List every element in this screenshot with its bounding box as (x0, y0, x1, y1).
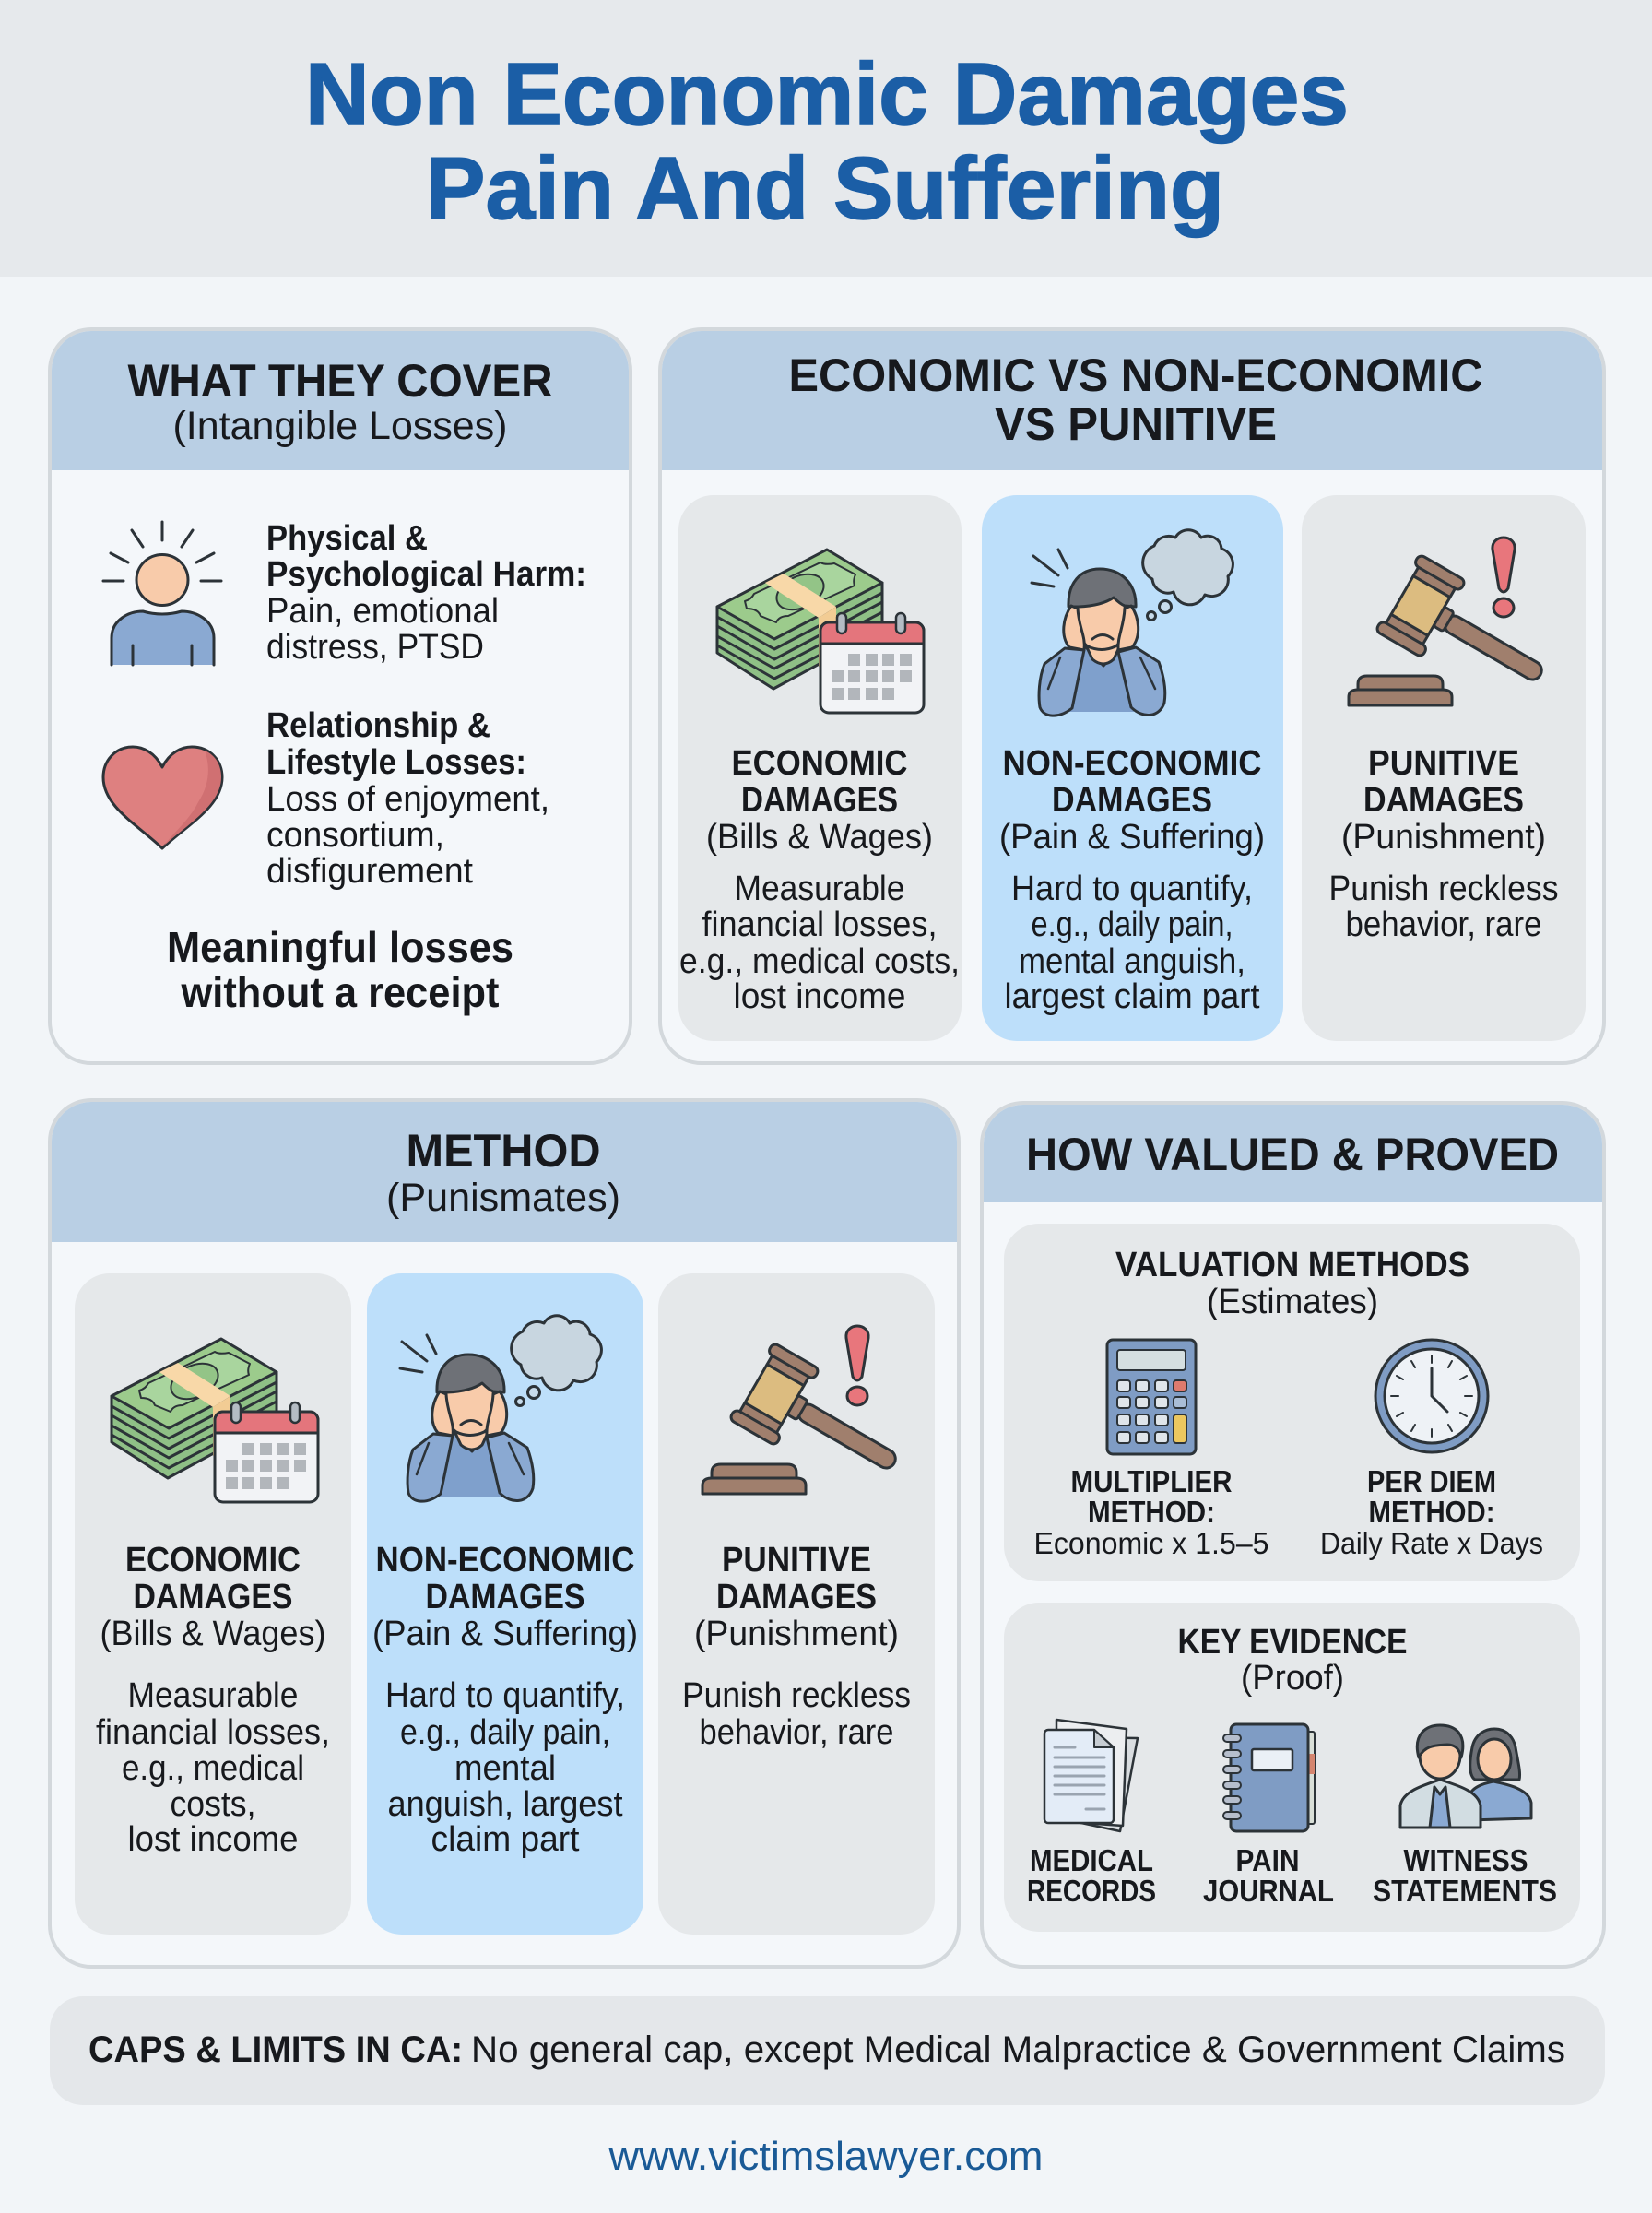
card: punitive damages (1302, 495, 1586, 1041)
text: economic damages description: (Bills & Wages) (100, 1615, 326, 1653)
text: non-economic damages description: NON-ECONOMIC (376, 1541, 634, 1580)
heading: what they cover: WHAT THEY COVER (127, 355, 553, 407)
text: non-economic damages description: claim part (431, 1820, 580, 1859)
icon: gavel and exclamation mark (702, 1326, 916, 1502)
text: economic damages description: ECONOMIC (732, 744, 907, 783)
text: non-economic damages description: largest claim part (1005, 977, 1260, 1016)
text: economic damages description: lost income (734, 977, 905, 1016)
text: multiplier method: METHOD: (1088, 1495, 1215, 1529)
text: relationship and lifestyle losses: Lifestyle Losses: (266, 743, 526, 782)
tagline (167, 923, 513, 1016)
card: key evidence (1004, 1603, 1580, 1932)
panel: what they cover (50, 329, 631, 1063)
icon: pain journal (1223, 1724, 1315, 1831)
icon: cash and calendar (112, 1339, 318, 1502)
text: witness statements: STATEMENTS (1373, 1874, 1557, 1908)
text: economic damages description: (Bills & Wages) (706, 818, 933, 857)
card: non-economic damages (982, 495, 1283, 1041)
banner: caps and limits (50, 1996, 1605, 2105)
heading: key evidence: (Proof) (1241, 1659, 1344, 1698)
icon: gavel and exclamation mark (1349, 538, 1563, 714)
card: valuation methods (1004, 1224, 1580, 1581)
text: non-economic damages description (372, 1541, 638, 1859)
text: per diem method: Daily Rate x Days (1320, 1526, 1543, 1560)
heading: method: (Punismates) (386, 1176, 620, 1220)
text: physical and psychological harm: distress, PTSD (266, 628, 484, 667)
icon: worried person with thought cloud (400, 1316, 601, 1501)
heading: key evidence (1178, 1623, 1407, 1698)
heading: valuation methods: VALUATION METHODS (1115, 1246, 1469, 1284)
text: medical records: RECORDS (1027, 1874, 1156, 1908)
text: per diem method: METHOD: (1368, 1495, 1495, 1529)
text: economic damages description: e.g., medical (122, 1749, 304, 1788)
text: non-economic damages description: Hard to quantify, (385, 1676, 625, 1715)
text: per diem method (1320, 1464, 1543, 1560)
text: punitive damages description: Punish reckless (682, 1676, 911, 1715)
text: punitive damages description: (Punishment) (1341, 818, 1546, 857)
text: physical and psychological harm: Psychological Harm: (266, 555, 586, 594)
icon: calculator (1107, 1340, 1196, 1454)
text: economic damages description: e.g., medical costs, (679, 942, 960, 981)
heading: how valued and proved: HOW VALUED & PROVED (1026, 1129, 1559, 1180)
heading: what they cover: (Intangible Losses) (173, 404, 507, 448)
heading: method: METHOD (406, 1125, 601, 1177)
text: punitive damages description: Punish reckless (1329, 870, 1558, 908)
text: pain journal: JOURNAL (1203, 1874, 1334, 1908)
text: per diem method: PER DIEM (1367, 1464, 1496, 1498)
text: non-economic damages description: e.g., daily pain, (1031, 905, 1233, 944)
icon: heart (103, 747, 222, 848)
heading: comparison (789, 349, 1482, 450)
heading: comparison: ECONOMIC VS NON-ECONOMIC (789, 349, 1482, 401)
text: non-economic damages description: (Pain & Suffering) (999, 818, 1265, 857)
text: punitive damages description: PUNITIVE (1368, 744, 1519, 783)
card: non-economic damages (367, 1273, 643, 1935)
heading: valuation methods: (Estimates) (1207, 1283, 1378, 1321)
text: punitive damages description: behavior, rare (1346, 905, 1541, 944)
text: relationship and lifestyle losses: disfigurement (266, 852, 473, 891)
text: economic damages description: financial losses, (702, 905, 937, 944)
text: punitive damages description: DAMAGES (1363, 781, 1524, 820)
text: medical records: MEDICAL (1030, 1843, 1153, 1877)
text: non-economic damages description: DAMAGES (426, 1578, 584, 1616)
text: economic damages description: DAMAGES (133, 1578, 293, 1616)
title banner: Pain And Suffering (426, 139, 1224, 238)
text: physical and psychological harm: Pain, emotional (266, 592, 499, 631)
text: punitive damages description (1329, 744, 1558, 944)
text: economic damages description: costs, (170, 1785, 256, 1824)
heading: valuation methods (1115, 1246, 1469, 1321)
heading: method (386, 1125, 620, 1220)
card: punitive damages (658, 1273, 935, 1935)
icon: cash and calendar (717, 550, 924, 713)
text: pain journal: PAIN (1235, 1843, 1300, 1877)
panel: economic vs non-economic vs punitive (660, 329, 1604, 1063)
text: relationship and lifestyle losses: Relationship & (266, 706, 490, 745)
icon: witnesses (1400, 1725, 1531, 1828)
text: economic damages description: DAMAGES (741, 781, 898, 820)
panel: how valued and proved (982, 1103, 1604, 1967)
text: non-economic damages description (999, 744, 1265, 1016)
text: economic damages description: financial losses, (96, 1713, 330, 1752)
footer url: www.victimslawyer.com (608, 2134, 1044, 2179)
title banner: Non Economic Damages (305, 45, 1349, 144)
panel: method (50, 1100, 959, 1967)
text: non-economic damages description: DAMAGES (1052, 781, 1212, 820)
text: non-economic damages description: NON-ECONOMIC (1003, 744, 1261, 783)
card: economic damages (678, 495, 962, 1041)
banner: caps and limits: No general cap, except Medical Malpractice & Government Claims (471, 2030, 1565, 2070)
text: multiplier method: Economic x 1.5–5 (1034, 1526, 1268, 1560)
text: physical and psychological harm: Physical & (266, 519, 428, 558)
text: non-economic damages description: mental anguish, (1019, 942, 1245, 981)
text: economic damages description (679, 744, 960, 1016)
tagline: Meaningful losses (167, 923, 513, 971)
text: economic damages description (96, 1541, 330, 1859)
text: economic damages description: Measurable (127, 1676, 299, 1715)
text: witness statements (1373, 1843, 1557, 1908)
text: physical and psychological harm (266, 519, 586, 667)
title banner (0, 0, 1652, 277)
text: economic damages description: ECONOMIC (125, 1541, 301, 1580)
text: punitive damages description (682, 1541, 911, 1752)
heading: key evidence: KEY EVIDENCE (1178, 1623, 1407, 1662)
text: economic damages description: Measurable (734, 870, 905, 908)
text: medical records (1027, 1843, 1156, 1908)
heading: what they cover (127, 355, 553, 448)
text: punitive damages description: behavior, rare (699, 1713, 894, 1752)
text: multiplier method: MULTIPLIER (1071, 1464, 1233, 1498)
text: non-economic damages description: mental (454, 1749, 556, 1788)
text: punitive damages description: DAMAGES (716, 1578, 877, 1616)
text: non-economic damages description: anguish, largest (387, 1785, 623, 1824)
text: economic damages description: lost income (127, 1820, 299, 1859)
banner: caps and limits: CAPS & LIMITS IN CA: (88, 2030, 463, 2070)
text: pain journal (1203, 1843, 1334, 1908)
tagline: without a receipt (181, 968, 500, 1016)
text: non-economic damages description: (Pain & Suffering) (372, 1615, 638, 1653)
icon: worried person with thought cloud (1032, 530, 1233, 716)
heading: comparison: VS PUNITIVE (995, 398, 1277, 450)
text: relationship and lifestyle losses: consortium, (266, 816, 444, 855)
text: punitive damages description: (Punishment) (694, 1615, 899, 1653)
icon: clock (1375, 1340, 1488, 1452)
icon: person in pain (103, 522, 221, 665)
text: relationship and lifestyle losses (266, 706, 549, 891)
text: non-economic damages description: Hard to quantify, (1011, 870, 1253, 908)
text: punitive damages description: PUNITIVE (722, 1541, 871, 1580)
text: non-economic damages description: e.g., daily pain, (400, 1713, 610, 1752)
card: economic damages (75, 1273, 351, 1935)
text: witness statements: WITNESS (1403, 1843, 1528, 1877)
text: multiplier method (1034, 1464, 1268, 1560)
icon: medical records (1044, 1720, 1138, 1831)
text: relationship and lifestyle losses: Loss of enjoyment, (266, 780, 549, 819)
